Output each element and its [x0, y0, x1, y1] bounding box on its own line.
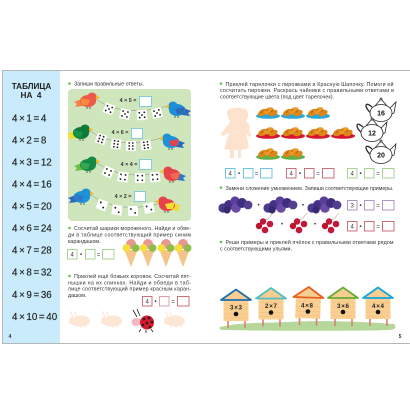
- hive 4x8: [292, 286, 324, 326]
- instruction: bees: с соответствующими ульями.: [220, 246, 292, 252]
- equation: ladybirds: 4: [146, 300, 150, 306]
- heading: table title: ТАБЛИЦА: [12, 82, 51, 91]
- table rows: 4 × 1 = 4: [12, 114, 47, 124]
- row 3: 4 × 4 =: [121, 162, 137, 168]
- equation: ice cream: 4: [71, 252, 75, 258]
- equation: cherries: •: [359, 224, 362, 230]
- equations: plates: =: [376, 172, 380, 178]
- equations: plates: 4: [290, 172, 294, 178]
- equation: plums: =: [376, 204, 380, 210]
- equation: ice cream: [68, 250, 114, 259]
- plums row: [218, 196, 341, 214]
- table rows: 4 × 5 = 20: [12, 202, 52, 212]
- equation: plums: •: [359, 204, 362, 210]
- instruction: ladybirds: дашом.: [68, 293, 86, 299]
- plums row: •: [302, 203, 304, 209]
- equations: plates: •: [238, 172, 240, 178]
- instruction: ladybirds: Приклей ещё божьих коровок. Сосчитай пят-: [74, 273, 191, 280]
- instruction: plates: сосчитать пирожки. Раскрась чайники с правильными ответами в: [220, 87, 394, 94]
- instruction: replace addition: Замени сложение умножением. Запиши соответствующие примеры.: [226, 186, 394, 192]
- equation: plums: [348, 200, 394, 210]
- teapots: [357, 98, 396, 164]
- instruction: plates: соответствующие цвета (под цвет тарелочек).: [220, 94, 334, 100]
- table rows: 4 × 4 = 16: [12, 180, 52, 190]
- cherries row: •: [314, 222, 316, 228]
- equations: plates: =: [316, 172, 320, 178]
- instruction: write answers: Запиши правильные ответы.: [74, 82, 144, 88]
- table rows: 4 × 7 = 28: [12, 246, 52, 256]
- equation: cherries: 4: [351, 224, 355, 230]
- heading: table number: НА 4: [21, 91, 42, 100]
- plums row: •: [257, 203, 260, 209]
- ladybird silhouettes: [69, 311, 185, 328]
- grass: [219, 321, 395, 331]
- table rows: 4 × 3 = 12: [12, 158, 52, 168]
- equation: cherries: =: [376, 224, 380, 230]
- page frame: [2, 70, 410, 344]
- equation: ice cream: •: [80, 252, 82, 258]
- hive 3x6: 3 × 6: [337, 303, 350, 310]
- row 1: 4 × 5 =: [120, 98, 136, 104]
- instruction: ladybirds: [68, 273, 191, 299]
- ice cream cones: [122, 239, 192, 267]
- table rows: 4 × 2 = 8: [12, 136, 47, 146]
- equation: ladybirds: [142, 296, 189, 306]
- cherries row: [256, 213, 339, 233]
- instruction: ice cream: карандашом.: [68, 239, 101, 245]
- page number left: 4: [9, 334, 12, 340]
- hive 2x7: 2 × 7: [265, 303, 278, 310]
- equation: cherries: [348, 222, 394, 231]
- equations: plates: 4: [351, 172, 355, 178]
- teapots: 20: [377, 152, 385, 160]
- row 2: 4 × 6 =: [112, 130, 128, 136]
- table rows: 4 × 8 = 32: [12, 268, 52, 278]
- table rows: 4 × 10 = 40: [12, 312, 58, 323]
- hive 3x6: [328, 288, 358, 326]
- instruction: plates: [220, 81, 394, 100]
- panel: multiplication table: [3, 71, 60, 343]
- hive 3x3: [221, 290, 251, 328]
- teapots: 12: [368, 130, 376, 138]
- equations: plates: [226, 168, 394, 178]
- instruction: ice cream: [68, 225, 191, 245]
- panel: birds and dice: [67, 89, 191, 221]
- equations: plates: •: [299, 172, 301, 178]
- plates with pies: [256, 106, 355, 160]
- equation: plums: 3: [351, 204, 355, 210]
- instruction: bees: [220, 239, 394, 252]
- hive 3x3: 3 × 3: [230, 304, 243, 312]
- teapots: 16: [377, 110, 385, 118]
- equation: ladybirds: •: [154, 300, 157, 306]
- instruction: ice cream: ди в таблице соответствующий пример синим: [68, 232, 191, 238]
- garlands: [90, 100, 168, 207]
- instruction: ice cream: Сосчитай шарики мороженого. Найди и обве-: [74, 225, 191, 232]
- hive 4x4: [363, 288, 393, 326]
- instruction: ladybirds: нышки на их спинках. Найди и обведи в таб-: [68, 279, 191, 286]
- hive 4x4: 4 × 4: [372, 303, 385, 310]
- row 4: 4 × 2 =: [115, 194, 131, 200]
- silhouette: Little Red Riding Hood: [221, 108, 252, 158]
- table rows: [12, 114, 58, 323]
- hive 4x8: 4 × 8: [301, 302, 314, 310]
- equations: plates: =: [255, 172, 259, 178]
- table rows: 4 × 9 = 36: [12, 290, 52, 301]
- instruction: bees: Реши примеры и приклей пчёлок с правильными ответами рядом: [226, 239, 394, 246]
- cherries row: •: [281, 222, 283, 228]
- equation: ice cream: =: [97, 252, 101, 258]
- icon: ladybird: [132, 309, 154, 333]
- instruction: ladybirds: лице соответствующий пример красным каран-: [68, 286, 191, 293]
- beehives on grass: [219, 286, 395, 331]
- equation: ladybirds: =: [171, 300, 175, 306]
- equations: plates: 4: [229, 172, 233, 178]
- instruction: plates: Приклей тарелочки с пирожками и Красную Шапочку. Помоги ей: [226, 81, 394, 88]
- page number right: 5: [399, 334, 402, 340]
- table rows: 4 × 6 = 24: [12, 224, 52, 234]
- equations: plates: •: [359, 172, 362, 178]
- hive 2x7: [256, 288, 286, 326]
